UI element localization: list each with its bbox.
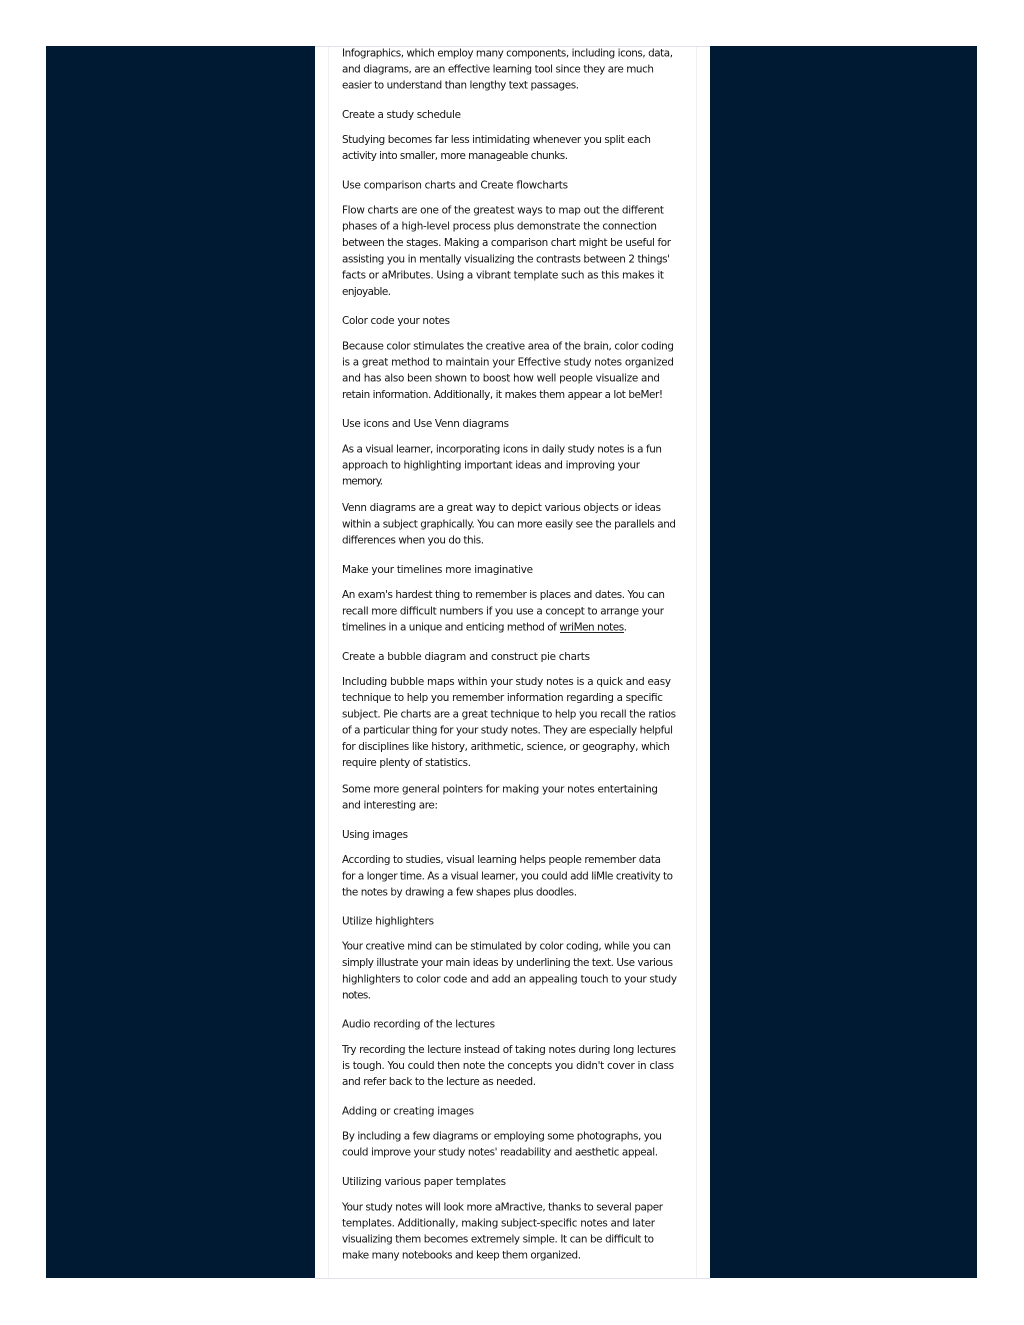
text block: adding images: By including a few diagrams or employing some photographs, you (342, 1131, 662, 1143)
heading: using images: Using images (342, 829, 408, 841)
top and bottom column rule (315, 46, 710, 1278)
text block: study schedule: Studying becomes far less intimidating whenever you split each (342, 134, 651, 146)
text block: bubble maps and pie charts (342, 676, 676, 769)
text block: highlighters: Your creative mind can be stimulated by color coding, while you can (341, 941, 671, 953)
heading: bubble diagram and pie charts: Create a bubble diagram and construct pie charts (342, 651, 590, 663)
text block: paper templates: visualizing them becomes extremely simple. It can be difficult to (342, 1234, 654, 1246)
text block: venn diagrams (342, 502, 676, 547)
text block: color coding: retain information. Additionally, it makes them appear a lot beMer! (342, 389, 663, 401)
text block: venn diagrams: within a subject graphically. You can more easily see the parallels and (342, 519, 676, 531)
text block: general pointers: and interesting are: (342, 800, 438, 812)
text block: highlighters: notes. (342, 990, 371, 1002)
text block: paper templates: Your study notes will look more aMractive, thanks to several paper (341, 1202, 664, 1214)
text block: bubble maps and pie charts: require plenty of statistics. (342, 757, 471, 769)
text block: icons: As a visual learner, incorporating icons in daily study notes is a fun (342, 444, 662, 456)
text block: using images (342, 854, 673, 899)
text block: color coding: and has also been shown to boost how well people visualize and (342, 373, 660, 385)
text block: audio recording: is tough. You could then note the concepts you didn't cover in class (342, 1060, 674, 1072)
text block: highlighters: highlighters to color code and add an appealing touch to your study (342, 974, 677, 986)
text block: paper templates (341, 1202, 664, 1262)
text block: infographics intro (342, 48, 673, 92)
text block: timelines: An exam's hardest thing to remember is places and dates. You can (342, 589, 665, 601)
text block: highlighters (341, 941, 677, 1002)
text block: bubble maps and pie charts: subject. Pie charts are a great technique to help you recall the ratios (342, 709, 676, 721)
text block: infographics intro: easier to understand than lengthy text passages. (342, 80, 579, 92)
text block: icons: approach to highlighting important ideas and improving your (342, 460, 641, 472)
text block: flow charts: phases of a high-level process plus demonstrate the connection (342, 221, 657, 233)
text block: infographics intro: and diagrams, are an effective learning tool since they are much (342, 64, 654, 76)
text block: highlighters: simply illustrate your main ideas by underlining the text. Use various (342, 957, 673, 969)
heading: paper templates: Utilizing various paper templates (342, 1176, 506, 1188)
text block: timelines (342, 589, 665, 634)
heading: create a study schedule: Create a study schedule (342, 109, 461, 121)
heading: timelines: Make your timelines more imaginative (342, 564, 533, 576)
text block: venn diagrams: Venn diagrams are a great way to depict various objects or ideas (342, 502, 661, 514)
text block: adding images (342, 1131, 662, 1159)
text block: icons: memory. (342, 476, 383, 488)
text block: using images: for a longer time. As a visual learner, you could add liMle creativity to (342, 871, 673, 883)
text block: color coding: Because color stimulates the creative area of the brain, color coding (342, 341, 674, 353)
text block: adding images: could improve your study notes' readability and aesthetic appeal. (342, 1147, 658, 1159)
text block: flow charts: between the stages. Making a comparison chart might be useful for (342, 237, 672, 249)
text block: using images: the notes by drawing a few shapes plus doodles. (342, 887, 577, 899)
text block: audio recording (341, 1044, 676, 1088)
text block: bubble maps and pie charts: Including bubble maps within your study notes is a quick and easy (342, 676, 671, 688)
text block: color coding: is a great method to maintain your Effective study notes organized (342, 357, 674, 369)
heading: icons and venn diagrams: Use icons and Use Venn diagrams (342, 418, 509, 430)
text block: flow charts: facts or aMributes. Using a vibrant template such as this makes it (342, 270, 664, 282)
white content column (315, 46, 710, 1278)
text block: using images: According to studies, visual learning helps people remember data (342, 854, 661, 866)
heading: adding images: Adding or creating images (342, 1106, 474, 1118)
text block: venn diagrams: differences when you do this. (342, 535, 484, 547)
text block: flow charts (342, 205, 672, 298)
text block: paper templates: make many notebooks and keep them organized. (342, 1250, 581, 1262)
text block: color coding (342, 341, 674, 401)
text block: study schedule: activity into smaller, more manageable chunks. (342, 150, 568, 162)
text block: flow charts: Flow charts are one of the greatest ways to map out the different (342, 205, 664, 217)
text block: audio recording: Try recording the lecture instead of taking notes during long lectures (341, 1044, 676, 1056)
heading: comparison charts and flowcharts: Use comparison charts and Create flowcharts (342, 180, 568, 192)
heading: color code your notes: Color code your notes (342, 315, 450, 327)
text block: bubble maps and pie charts: of a particular thing for your study notes. They are especially helpful (342, 725, 673, 737)
text block: paper templates: templates. Additionally, making subject-specific notes and later (342, 1218, 656, 1230)
text block: study schedule (342, 134, 651, 162)
text block: flow charts: assisting you in mentally visualizing the contrasts between 2 things' (342, 254, 670, 266)
text block: bubble maps and pie charts: for disciplines like history, arithmetic, science, or geography, which (342, 741, 670, 753)
text block: bubble maps and pie charts: technique to help you remember information regarding a specific (342, 692, 663, 704)
heading: audio recording: Audio recording of the lectures (342, 1019, 495, 1031)
text block: general pointers: Some more general pointers for making your notes entertaining (342, 784, 658, 796)
heading: utilize highlighters: Utilize highlighters (342, 916, 434, 928)
text block: general pointers (342, 784, 658, 812)
text block: audio recording: and refer back to the lecture as needed. (342, 1076, 536, 1088)
text block: timelines: timelines in a unique and enticing method of wriMen notes. (342, 622, 627, 634)
text block: infographics intro: Infographics, which employ many components, including icons, data, (342, 48, 673, 60)
text block: icons (342, 444, 662, 488)
text block: flow charts: enjoyable. (342, 286, 391, 298)
text block: timelines: recall more difficult numbers if you use a concept to arrange your (342, 606, 665, 618)
inner article panel (328, 46, 696, 1278)
